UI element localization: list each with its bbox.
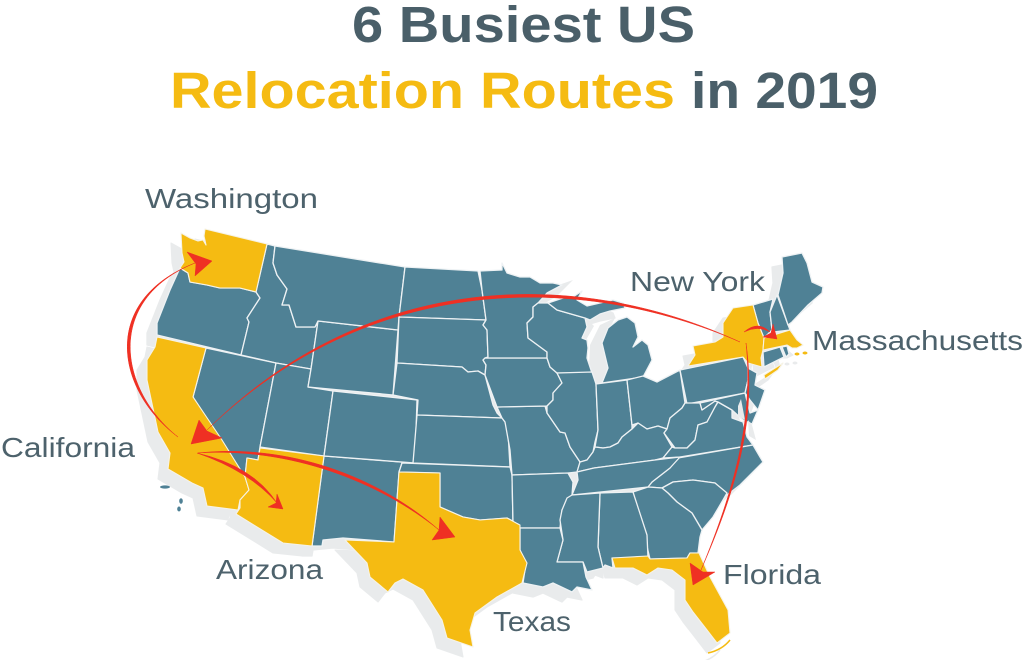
- arrow: California to Texas: [198, 451, 455, 540]
- arrow: New York to California: [191, 294, 740, 444]
- label: Massachusetts: Massachusetts: [812, 325, 1023, 356]
- title: [170, 0, 878, 119]
- state: Arizona: [236, 448, 324, 546]
- arrow: New York to Massachusetts: [744, 324, 777, 339]
- label: California: California: [1, 432, 135, 463]
- state: Florida: [612, 553, 730, 653]
- title: Relocation Routes: [170, 62, 675, 119]
- arrow: California to Washington: [127, 252, 212, 437]
- channel islands: [160, 485, 183, 512]
- label: Florida: Florida: [723, 559, 821, 590]
- state: Massachusetts: [763, 330, 808, 356]
- arrow: New York to Florida: [690, 343, 749, 585]
- state: California: [147, 337, 249, 510]
- map drop shadow: [137, 239, 813, 660]
- label: Texas: Texas: [493, 606, 571, 637]
- label: Washington: Washington: [145, 183, 318, 214]
- title: in 2019: [691, 62, 878, 119]
- state: Texas: [345, 472, 527, 647]
- chesapeake and delaware bays: [738, 399, 756, 440]
- great lakes shading: [538, 280, 615, 386]
- map: United States: [147, 229, 823, 653]
- state: Washington: [180, 229, 267, 292]
- state: New York: [688, 305, 783, 379]
- non-highlighted states: [157, 244, 823, 592]
- label: Arizona: Arizona: [216, 554, 323, 585]
- label: New York: New York: [630, 266, 766, 297]
- arrow: California to Arizona: [197, 453, 283, 509]
